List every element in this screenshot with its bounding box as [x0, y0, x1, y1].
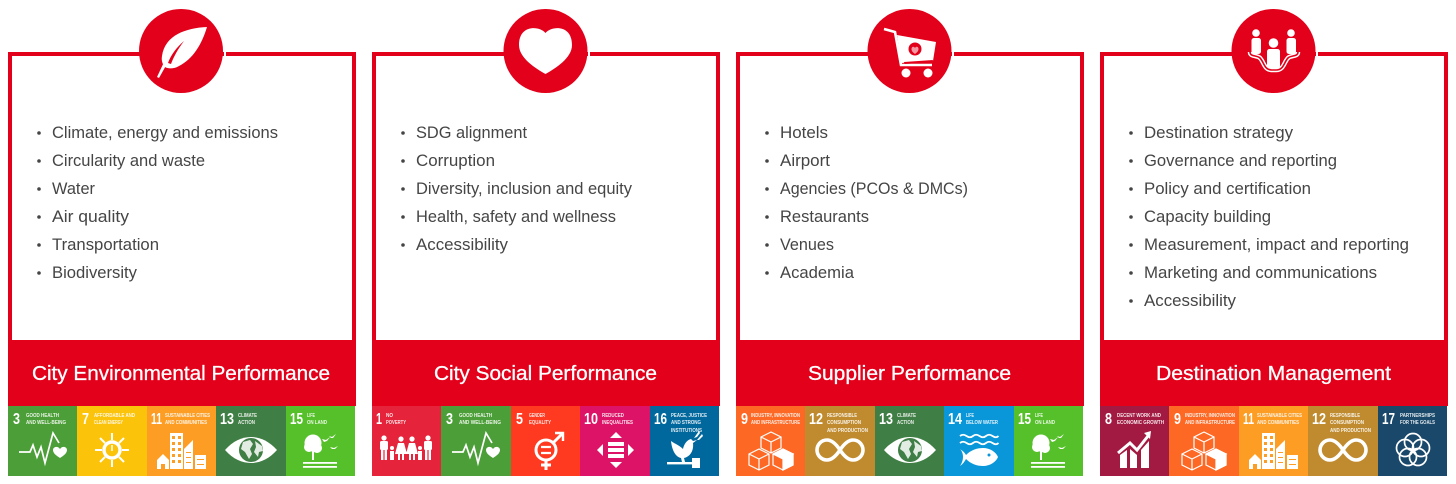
SDG tiles [1100, 406, 1447, 476]
SDG 12: AND PRODUCTION [827, 428, 868, 434]
bullet list: Restaurants [780, 208, 869, 226]
SDG 14: BELOW WATER [966, 420, 998, 426]
heading band: City Social Performance [434, 363, 657, 385]
SDG 9: INDUSTRY, INNOVATION [1185, 413, 1235, 419]
SDG 13 [875, 406, 944, 476]
SDG tiles [8, 406, 355, 476]
SDG 8 [1100, 406, 1169, 476]
SDG 10: REDUCED [602, 413, 624, 419]
bullet list: Venues [780, 236, 834, 254]
panel frame [10, 54, 354, 344]
SDG 3: 3 [446, 411, 453, 428]
SDG 1 [372, 406, 441, 476]
SDG 3 [8, 406, 77, 476]
SDG 11 [1239, 406, 1308, 476]
icon: heart [504, 9, 588, 93]
SDG 3: GOOD HEALTH [26, 413, 59, 419]
panel: Supplier Performance [736, 9, 1084, 476]
SDG 5: EQUALITY [529, 420, 551, 426]
SDG 13: ACTION [897, 420, 914, 426]
bullet list: Climate, energy and emissions [52, 124, 278, 142]
SDG 13: 13 [220, 411, 234, 428]
SDG 10: INEQUALITIES [602, 420, 633, 426]
heading band [736, 340, 1084, 406]
SDG 9: 9 [1174, 411, 1181, 428]
SDG 15: ON LAND [307, 420, 327, 426]
SDG 15: LIFE [307, 413, 315, 419]
SDG 15 [1014, 406, 1083, 476]
heading band: City Environmental Performance [32, 363, 330, 385]
SDG 14: 14 [948, 411, 962, 428]
SDG 12: AND PRODUCTION [1330, 428, 1371, 434]
SDG 12: 12 [809, 411, 823, 428]
bullet list: Policy and certification [1144, 180, 1311, 198]
SDG 15: LIFE [1035, 413, 1043, 419]
SDG 17: 17 [1382, 411, 1395, 428]
bullet list: Circularity and waste [52, 152, 205, 170]
bullet list: Corruption [416, 152, 495, 170]
SDG 11: AND COMMUNITIES [1257, 420, 1299, 426]
bullet list: Capacity building [1144, 208, 1271, 226]
SDG 16: AND STRONG [671, 420, 701, 426]
icon: leaf [139, 9, 223, 93]
SDG 8: ECONOMIC GROWTH [1117, 420, 1164, 426]
SDG 1: POVERTY [386, 420, 406, 426]
SDG 16: PEACE, JUSTICE [671, 413, 707, 419]
SDG 16: INSTITUTIONS [671, 428, 702, 434]
SDG 9: AND INFRASTRUCTURE [1185, 420, 1235, 426]
SDG 11: SUSTAINABLE CITIES [1257, 413, 1302, 419]
SDG 1: NO [386, 413, 393, 419]
bullet list: Accessibility [1144, 292, 1237, 310]
SDG 14: LIFE [966, 413, 974, 419]
SDG 11: AND COMMUNITIES [165, 420, 207, 426]
bullet list [37, 124, 278, 282]
SDG 9 [1169, 406, 1239, 476]
bullet list: Air quality [52, 208, 130, 226]
heading band [8, 340, 356, 406]
SDG 12 [1308, 406, 1378, 476]
SDG 11: 11 [1243, 411, 1254, 428]
SDG 15: 15 [1018, 411, 1031, 428]
SDG 1: 1 [376, 411, 382, 428]
heading band [372, 340, 720, 406]
bullet list: Hotels [780, 124, 828, 142]
SDG 16 [650, 406, 719, 476]
SDG 12: RESPONSIBLE [827, 413, 857, 419]
SDG 8: DECENT WORK AND [1117, 413, 1161, 419]
SDG 12: CONSUMPTION [827, 420, 861, 426]
bullet list: SDG alignment [416, 124, 527, 142]
bullet list: Destination strategy [1144, 124, 1294, 142]
bullet list [765, 124, 968, 282]
icon: people network [1232, 9, 1316, 93]
bullet list [401, 124, 633, 254]
SDG 7: 7 [82, 411, 89, 428]
SDG 12 [805, 406, 875, 476]
bullet list: Marketing and communications [1144, 264, 1377, 282]
SDG 8: 8 [1105, 411, 1112, 428]
heading band: Destination Management [1156, 363, 1391, 385]
SDG 15: ON LAND [1035, 420, 1055, 426]
bullet list: Governance and reporting [1144, 152, 1337, 170]
SDG 10 [580, 406, 650, 476]
icon: shopping cart [868, 9, 952, 93]
SDG 13: 13 [879, 411, 893, 428]
SDG 7: AFFORDABLE AND [94, 413, 135, 419]
SDG 3: 3 [13, 411, 20, 428]
SDG 15: 15 [290, 411, 303, 428]
heading band: Supplier Performance [808, 363, 1011, 385]
panel frame [1102, 54, 1446, 344]
bullet list: Accessibility [416, 236, 509, 254]
SDG 11 [147, 406, 216, 476]
SDG 5 [511, 406, 580, 476]
SDG 11: 11 [151, 411, 162, 428]
panel frame [738, 54, 1082, 344]
panel: City Environmental Performance [8, 9, 356, 476]
SDG 9: AND INFRASTRUCTURE [751, 420, 800, 426]
SDG 13: CLIMATE [238, 413, 257, 419]
heading band [1100, 340, 1448, 406]
SDG 15 [286, 406, 355, 476]
panel: Destination Management [1100, 9, 1448, 476]
SDG 5: 5 [516, 411, 523, 428]
SDG 7 [77, 406, 147, 476]
bullet list [1129, 124, 1409, 310]
SDG 3: AND WELL-BEING [26, 420, 66, 426]
SDG 13: CLIMATE [897, 413, 916, 419]
bullet list: Transportation [52, 236, 159, 254]
SDG 5: GENDER [529, 413, 545, 419]
bullet list: Diversity, inclusion and equity [416, 180, 633, 198]
bullet list: Academia [780, 264, 855, 282]
bullet list: Measurement, impact and reporting [1144, 236, 1409, 254]
SDG tiles [372, 406, 719, 476]
SDG 17 [1378, 406, 1447, 476]
bullet list: Airport [780, 152, 830, 170]
bullet list: Health, safety and wellness [416, 208, 616, 226]
panel: City Social Performance [372, 9, 720, 476]
SDG 11: SUSTAINABLE CITIES [165, 413, 210, 419]
SDG 9: 9 [741, 411, 748, 428]
SDG 14 [944, 406, 1014, 476]
SDG 13: ACTION [238, 420, 255, 426]
SDG 12: CONSUMPTION [1330, 420, 1364, 426]
SDG 17: FOR THE GOALS [1400, 420, 1435, 426]
SDG 9: INDUSTRY, INNOVATION [751, 413, 800, 419]
SDG 12: RESPONSIBLE [1330, 413, 1360, 419]
SDG 9 [736, 406, 805, 476]
SDG tiles [736, 406, 1083, 476]
SDG 7: CLEAN ENERGY [94, 420, 123, 426]
SDG 10: 10 [584, 411, 598, 428]
SDG 13 [216, 406, 286, 476]
panel frame [374, 54, 718, 344]
SDG 3: GOOD HEALTH [459, 413, 492, 419]
bullet list: Water [52, 180, 95, 198]
SDG 12: 12 [1312, 411, 1326, 428]
SDG 16: 16 [654, 411, 667, 428]
SDG 17: PARTNERSHIPS [1400, 413, 1435, 419]
SDG 3: AND WELL-BEING [459, 420, 501, 426]
SDG 3 [441, 406, 511, 476]
bullet list: Agencies (PCOs & DMCs) [780, 180, 968, 198]
bullet list: Biodiversity [52, 264, 138, 282]
